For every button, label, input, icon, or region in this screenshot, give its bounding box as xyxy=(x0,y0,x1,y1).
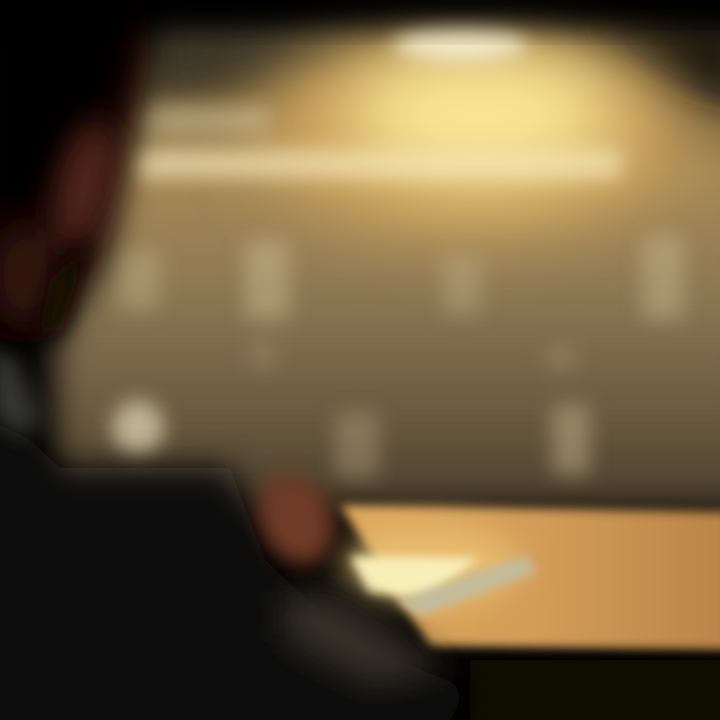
hair and beard shadow xyxy=(0,0,130,335)
edge vignette xyxy=(0,0,720,20)
blurred heading lines xyxy=(132,105,622,178)
foreground table shadow xyxy=(470,660,720,720)
person body xyxy=(0,410,470,720)
lamp glow on the wall xyxy=(255,25,685,235)
lamp xyxy=(394,27,526,61)
hand xyxy=(244,463,348,577)
person head xyxy=(0,0,150,345)
table xyxy=(340,505,720,650)
forearm and sleeve xyxy=(285,590,450,685)
ear and cheek xyxy=(0,116,126,325)
table bright edge xyxy=(340,525,520,605)
paper xyxy=(350,556,480,600)
person shoulder highlight xyxy=(0,345,40,440)
blurred column icons and text xyxy=(112,235,684,478)
wall xyxy=(55,36,720,508)
ceiling shadow at the top right xyxy=(570,20,720,110)
ceiling shadow at the top xyxy=(150,25,370,95)
pen in hand xyxy=(395,556,537,616)
